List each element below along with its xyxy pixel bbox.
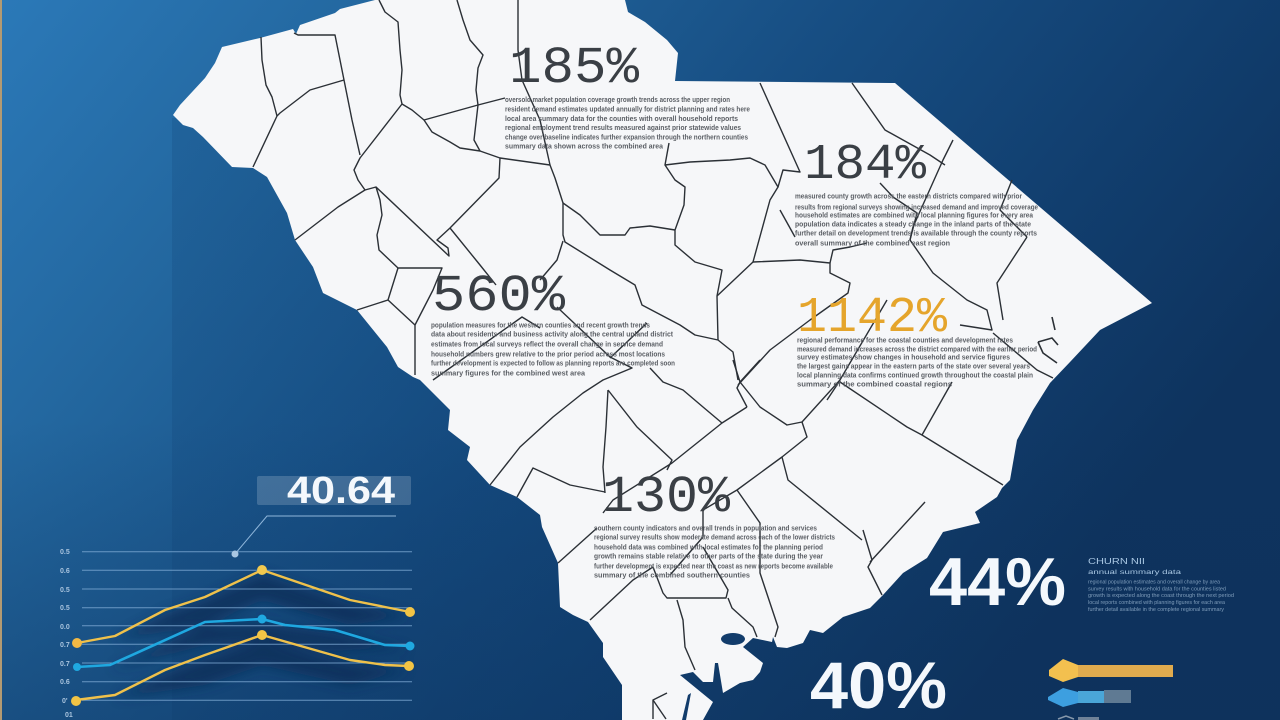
side note beside 44%: CHURN NII xyxy=(1088,557,1145,566)
axis labels: 0.6 xyxy=(60,568,70,575)
description: summary of the combined coastal regions xyxy=(797,380,952,388)
blue series xyxy=(73,614,414,671)
axis labels: 0' xyxy=(62,698,68,705)
description: local planning data confirms continued growth throughout the coastal plain xyxy=(797,370,1033,380)
axis labels: 0.7 xyxy=(60,661,70,668)
description: change over baseline indicates further expansion through the northern counties xyxy=(505,132,748,142)
description: measured county growth across the eastern districts compared with prior xyxy=(795,192,1022,200)
description xyxy=(431,320,675,378)
stat: 40%: 40% xyxy=(810,648,947,720)
description: resident demand estimates updated annually for district planning and rates here xyxy=(505,104,750,114)
description: estimates from local surveys reflect the overall change in service demand xyxy=(431,340,663,348)
axis labels: 0.5 xyxy=(60,587,70,594)
description: household data was combined with local estimates for the planning period xyxy=(594,542,823,552)
callout value box xyxy=(257,470,411,512)
value: 130% xyxy=(602,468,731,527)
side note beside 44%: growth is expected along the coast through the next period xyxy=(1088,593,1234,599)
description: local area summary data for the counties with overall household reports xyxy=(505,114,738,123)
callout: 184% xyxy=(795,137,1038,248)
description: oversold market population coverage growth trends across the upper region xyxy=(505,95,730,104)
axis labels: 0.5 xyxy=(60,549,70,556)
map silhouette xyxy=(173,0,1152,720)
description xyxy=(795,192,1038,248)
side note beside 44%: regional population estimates and overall change by area xyxy=(1088,580,1220,586)
callout: 560% xyxy=(431,267,675,378)
axis labels: 0.7 xyxy=(60,642,70,649)
side note beside 44%: annual summary data xyxy=(1088,569,1182,576)
value: 1142% xyxy=(797,290,948,347)
callout: 130% xyxy=(594,468,835,580)
description: data about residents and business activity along the central upland district xyxy=(431,330,673,338)
axis labels: 0.5 xyxy=(60,605,70,612)
callout: 185% xyxy=(505,39,750,150)
description: the largest gains appear in the eastern parts of the state over several years xyxy=(797,362,1030,370)
description: household numbers grew relative to the prior period across most locations xyxy=(431,350,665,358)
description: further development is expected near the coast as new reports become available xyxy=(594,562,833,570)
description: summary of the combined southern counties xyxy=(594,570,750,580)
lower yellow series xyxy=(71,630,414,706)
bay and inlets xyxy=(682,633,745,720)
description: growth remains stable relative to other parts of the state during the year xyxy=(594,552,823,560)
description xyxy=(797,336,1037,388)
value: 560% xyxy=(432,267,566,326)
side note beside 44%: further detail available in the complete regional summary xyxy=(1088,607,1225,613)
description: southern county indicators and overall trends in population and services xyxy=(594,524,817,532)
description: further detail on development trends is available through the county reports xyxy=(795,228,1037,238)
value: 185% xyxy=(509,39,640,98)
map of counties xyxy=(173,0,1152,720)
axis labels: 0.6 xyxy=(60,679,70,686)
side note beside 44%: survey results with household data for the counties listed xyxy=(1088,586,1226,592)
description: measured demand increases across the district compared with the earlier period xyxy=(797,344,1037,354)
description: population data indicates a steady change in the inland parts of the state xyxy=(795,220,1031,228)
county borders xyxy=(253,0,1053,719)
description: regional survey results show moderate demand across each of the lower districts xyxy=(594,532,835,542)
axis labels xyxy=(60,549,73,719)
description: further development is expected to follow as planning reports are completed soon xyxy=(431,358,675,368)
coastal islets xyxy=(1038,317,1058,363)
description: results from regional surveys showing increased demand and improved coverage xyxy=(795,202,1038,212)
description: summary figures for the combined west area xyxy=(431,368,586,378)
description xyxy=(594,524,835,580)
value: 184% xyxy=(804,137,927,194)
stat: 44%: 44% xyxy=(929,544,1066,620)
axis labels: 0.0 xyxy=(60,624,70,631)
description: regional performance for the coastal counties and development rates xyxy=(797,336,1013,344)
grid lines xyxy=(82,552,412,700)
axis labels: 01 xyxy=(65,712,73,719)
blue bar xyxy=(1048,688,1131,707)
side note beside 44% xyxy=(1088,557,1234,613)
description: population measures for the western counties and recent growth trends xyxy=(431,320,650,330)
line chart xyxy=(60,470,415,719)
grey bar xyxy=(1058,716,1099,720)
description: summary data shown across the combined area xyxy=(505,142,664,150)
upper yellow series xyxy=(72,565,415,648)
legend bars xyxy=(1048,659,1173,720)
side note beside 44%: local reports combined with planning figures for each area xyxy=(1088,600,1225,606)
description: survey estimates show changes in household and service figures xyxy=(797,352,1010,362)
callout value box: 40.64 xyxy=(287,470,395,512)
callout: 1142% highlighted xyxy=(797,290,1037,388)
description: overall summary of the combined east region xyxy=(795,238,950,248)
description: household estimates are combined with local planning figures for every area xyxy=(795,210,1034,220)
line shadows xyxy=(110,574,410,698)
yellow bar xyxy=(1049,659,1173,682)
description xyxy=(505,95,750,150)
callout leader xyxy=(232,516,396,558)
description: regional employment trend results measured against prior statewide values xyxy=(505,123,741,132)
